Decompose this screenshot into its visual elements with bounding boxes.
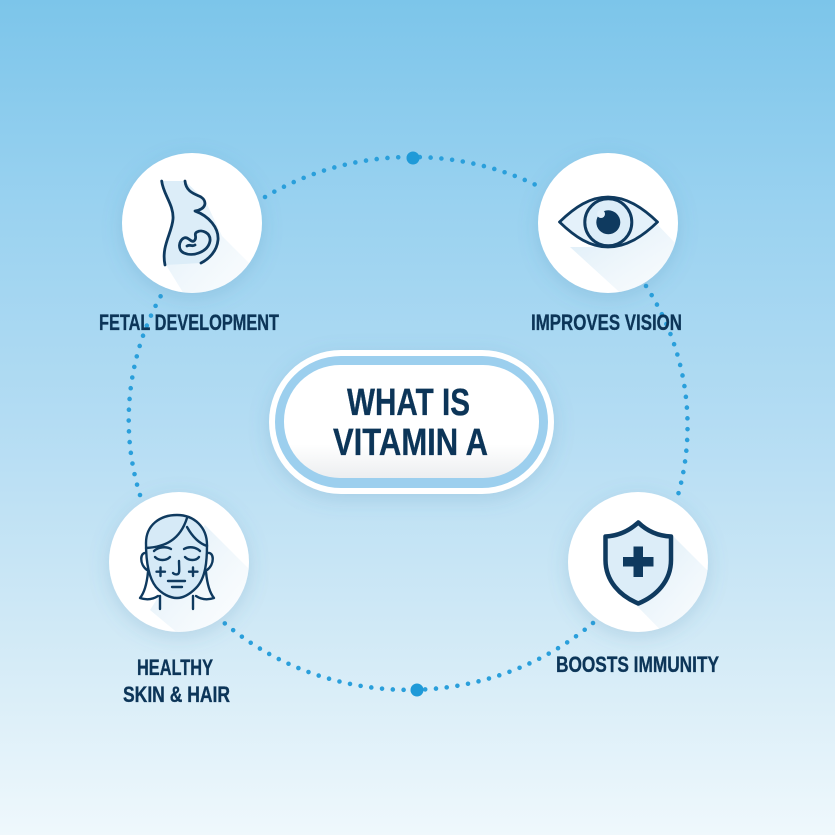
panel: improves vision: [532, 153, 681, 330]
title: WHAT IS: [347, 382, 470, 424]
panel: fetal development: [99, 153, 290, 335]
long shadow: [150, 525, 248, 632]
label: healthy skin and hair: [123, 655, 230, 707]
icon: eye: [560, 197, 658, 247]
ring node: bottom: [410, 684, 424, 696]
label: fetal development: FETAL DEVELOPMENT: [99, 310, 279, 335]
ring node: top: [406, 152, 420, 164]
label: boosts immunity: BOOSTS IMMUNITY: [556, 652, 719, 677]
title: [333, 382, 488, 464]
icon: shield: [606, 522, 671, 604]
label: healthy skin and hair: SKIN & HAIR: [123, 682, 230, 707]
long shadow: [636, 536, 707, 628]
panel: healthy skin and hair: [109, 492, 260, 707]
panel: boosts immunity: [557, 492, 719, 672]
dotted ring: [129, 157, 688, 690]
icon: face: [140, 515, 214, 609]
title: VITAMIN A: [333, 422, 488, 464]
long shadow: [570, 224, 675, 292]
label: healthy skin and hair: HEALTHY: [137, 655, 213, 680]
panel: central pill: [269, 350, 554, 494]
label: improves vision: IMPROVES VISION: [531, 310, 682, 335]
icon: pregnant belly: [162, 181, 218, 265]
long shadow: [166, 182, 248, 293]
